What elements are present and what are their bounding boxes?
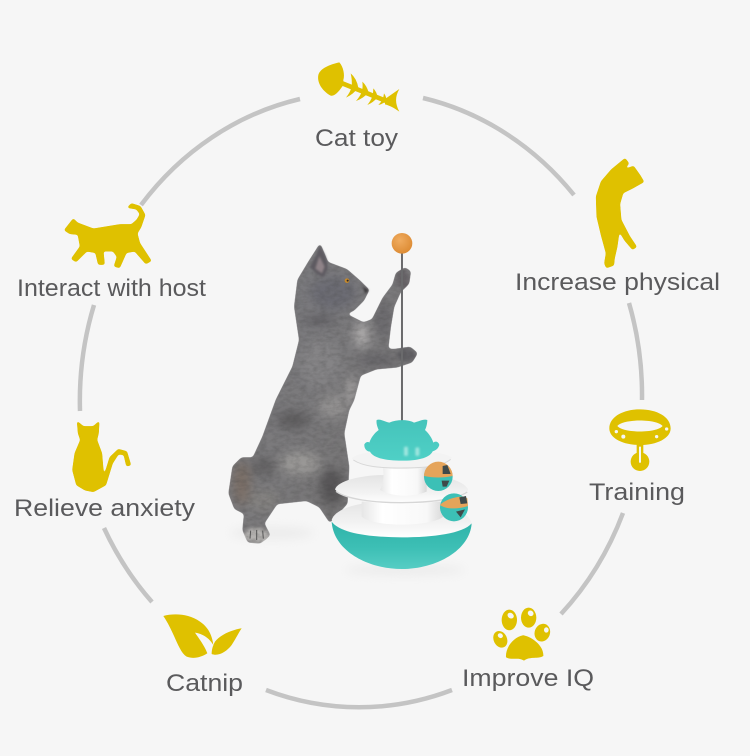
raised lower paw bbox=[397, 349, 415, 361]
teal dome with ears bbox=[364, 420, 439, 461]
label: Catnip: Catnip bbox=[166, 670, 243, 697]
label: Cat toy: Cat toy bbox=[315, 125, 398, 152]
top tier bbox=[352, 451, 452, 469]
wand stick bbox=[401, 252, 403, 422]
hind paw bbox=[245, 528, 269, 542]
cat body with fur shading bbox=[229, 245, 417, 543]
icon: paw print bbox=[491, 608, 553, 661]
icon: fish skeleton bbox=[318, 62, 399, 112]
upper bell ball bbox=[424, 462, 453, 491]
bottom tier bbox=[332, 501, 472, 537]
inner ear bbox=[315, 256, 325, 273]
label: Improve IQ: Improve IQ bbox=[462, 665, 594, 692]
icon: catnip leaves bbox=[163, 614, 242, 658]
nose bbox=[363, 287, 369, 294]
icon: walking cat bbox=[65, 204, 151, 267]
circular ring of arc segments bbox=[80, 98, 642, 707]
label: Increase physical: Increase physical bbox=[515, 269, 720, 296]
label: Training: Training bbox=[589, 479, 685, 506]
toy wand bbox=[392, 233, 412, 422]
eye bbox=[345, 278, 349, 283]
icon: stretching cat bbox=[597, 159, 643, 267]
label: Relieve anxiety: Relieve anxiety bbox=[14, 495, 195, 522]
toy tower bbox=[332, 420, 472, 569]
raised upper paw bbox=[396, 270, 409, 289]
floor shadows bbox=[230, 527, 465, 575]
middle tier bbox=[335, 475, 468, 504]
dome highlights bbox=[404, 447, 419, 456]
orange ball bbox=[392, 233, 412, 254]
upper pillar bbox=[380, 465, 427, 496]
teal bowl bbox=[332, 522, 472, 569]
label: Interact with host: Interact with host bbox=[17, 275, 206, 302]
cat photo bbox=[227, 243, 420, 543]
icon: collar with bell bbox=[609, 409, 671, 471]
fur texture bbox=[232, 264, 407, 542]
ear bbox=[310, 246, 327, 277]
lower bell ball bbox=[440, 493, 468, 521]
icon: sitting cat bbox=[73, 422, 131, 492]
lower pillar bbox=[362, 502, 443, 525]
hind paw toes bbox=[250, 530, 263, 540]
